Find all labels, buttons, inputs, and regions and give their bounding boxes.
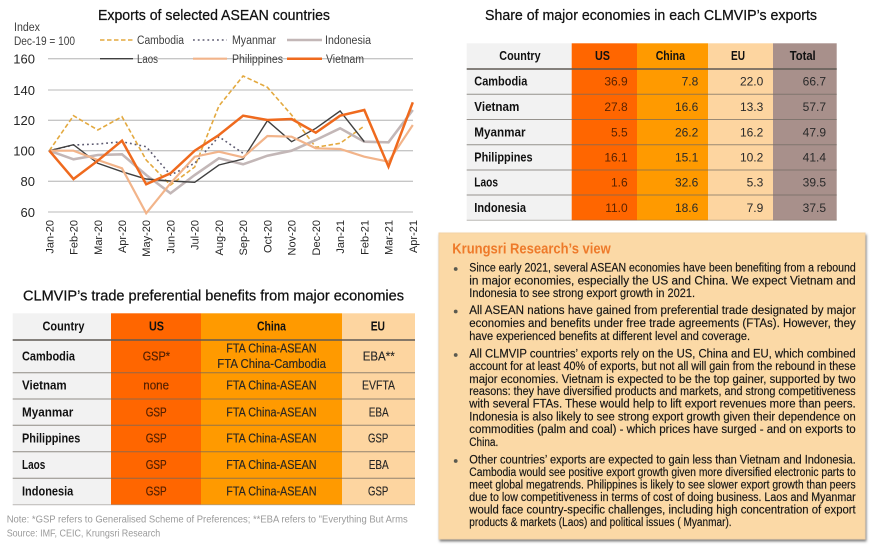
- x axis labels: Apr-20: [117, 220, 129, 253]
- bullet 2: economies and benefits under free trade agreements (FTAs). However, they: [469, 318, 856, 330]
- row: Myanmar: [22, 405, 389, 419]
- x axis labels: Jan-20: [44, 220, 56, 254]
- table header: Country: [42, 320, 85, 334]
- row: Vietnam: [474, 100, 826, 114]
- row: Vietnam: EVFTA: [362, 379, 396, 393]
- row: Philippines: GSP: [368, 431, 388, 445]
- row: Laos: EBA: [369, 458, 389, 472]
- y axis labels: 120: [13, 113, 35, 128]
- row: Myanmar: EBA: [369, 405, 389, 419]
- bullet 4: Other countries’ exports are expected to gain less than Vietnam and Indonesia.: [469, 454, 856, 466]
- table header: US: [595, 49, 610, 63]
- table header: EU: [731, 49, 745, 63]
- bullet 3: account for at least 40% of exports, but not all will gain from the rebound in these: [469, 361, 856, 373]
- row: Myanmar: 16.2: [740, 125, 764, 139]
- y axis labels: [13, 52, 35, 220]
- x axis labels: Jun-20: [166, 220, 178, 254]
- line: Vietnam: [49, 102, 413, 184]
- row: Laos: 5.3: [747, 176, 764, 190]
- line: Myanmar: [49, 137, 243, 175]
- x axis labels: Aug-20: [214, 220, 226, 255]
- row: Cambodia: [474, 75, 826, 89]
- x axis labels: Mar-21: [384, 220, 396, 255]
- row: Indonesia: GSP: [146, 485, 167, 499]
- y axis labels: 60: [21, 205, 35, 220]
- bullet 2: [454, 305, 856, 343]
- row: Vietnam: FTA China-ASEAN: [226, 379, 317, 393]
- bullet 1: [454, 262, 856, 300]
- row: Laos: [474, 176, 826, 190]
- bullet 3: [454, 348, 856, 449]
- row: Philippines: [22, 431, 388, 445]
- x axis labels: Apr-21: [408, 220, 420, 253]
- line: Cambodia: [49, 76, 364, 185]
- x axis labels: Nov-20: [287, 220, 299, 255]
- row: Cambodia: 22.0: [740, 75, 764, 89]
- table header: Country: [499, 49, 541, 63]
- table header: [42, 320, 385, 334]
- table header: [499, 49, 816, 63]
- row: Laos: GSP: [146, 458, 167, 472]
- row: Indonesia: Indonesia: [474, 201, 527, 215]
- row: Indonesia: [22, 485, 388, 499]
- line: Laos: [49, 111, 364, 182]
- row: Vietnam: Vietnam: [22, 379, 67, 393]
- bullet 3: reasons: they have diversified products and markets, and strong competitiveness: [469, 386, 856, 398]
- x axis labels: Sep-20: [238, 220, 250, 255]
- row: Indonesia: 11.0: [605, 201, 628, 215]
- panel: trade preferential benefits: [13, 288, 415, 505]
- x axis labels: Dec-20: [311, 220, 323, 255]
- row: Philippines: 16.1: [604, 150, 628, 164]
- row: Philippines: Philippines: [22, 431, 80, 445]
- row: Philippines: FTA China-ASEAN: [226, 431, 317, 445]
- row: Myanmar: GSP: [146, 405, 167, 419]
- x axis labels: Mar-20: [93, 220, 105, 255]
- row: Philippines: 10.2: [740, 150, 764, 164]
- bullet 1: in major economies, especially the US and China. We expect Vietnam and: [469, 275, 856, 287]
- x axis labels: May-20: [141, 220, 153, 257]
- bullet 4: [454, 454, 856, 529]
- x axis labels: Oct-20: [262, 220, 274, 253]
- heading: Krungsri Research's view: Krungsri Research’s view: [452, 240, 611, 258]
- row: Cambodia: 7.8: [682, 75, 699, 89]
- row: Cambodia: GSP*: [143, 350, 170, 364]
- row: Indonesia: FTA China-ASEAN: [226, 485, 317, 499]
- x axis labels: Jan-21: [335, 220, 347, 254]
- y axis labels: 100: [13, 144, 35, 158]
- row: Indonesia: 7.9: [747, 201, 764, 215]
- row: Cambodia: 66.7: [803, 75, 826, 89]
- legend: [100, 35, 372, 66]
- table backgrounds: [13, 313, 415, 505]
- title: benefits table: CLMVIP’s trade preferential benefits from major economies: [23, 288, 404, 304]
- row: Myanmar: 26.2: [675, 125, 699, 139]
- line: Indonesia: [49, 110, 413, 193]
- y axis labels: 160: [13, 52, 35, 66]
- x axis labels: Feb-21: [359, 220, 371, 255]
- row: Vietnam: 13.3: [740, 100, 764, 114]
- row: Indonesia: [474, 201, 826, 215]
- table header: US: [149, 320, 164, 334]
- y axis unit label: [14, 22, 75, 48]
- x axis labels: Jul-20: [190, 220, 202, 250]
- legend: Myanmar: [232, 35, 276, 47]
- row: Indonesia: 18.6: [675, 201, 699, 215]
- legend: Cambodia: [137, 35, 185, 47]
- row: Philippines: GSP: [146, 431, 167, 445]
- table header: EU: [371, 320, 385, 334]
- row: Laos: Laos: [22, 458, 45, 472]
- bullet 3: with several FTAs. These would help to lift export revenues more than peers.: [468, 398, 856, 410]
- row: Philippines: 15.1: [675, 150, 699, 164]
- panel: Krungsri Research's view: [439, 233, 865, 539]
- row: Cambodia: FTA China-Cambodia: [217, 357, 326, 371]
- footnote and source: Note: *GSP refers to Generalised Scheme of Preferences; **EBA refers to "Everything But Arms: [7, 514, 408, 526]
- x axis labels: Feb-20: [68, 220, 80, 255]
- row: Philippines: Philippines: [474, 150, 533, 164]
- table backgrounds: [467, 43, 837, 220]
- bullet 1: Indonesia to see strong export growth in 2021.: [469, 288, 695, 300]
- row: Myanmar: 47.9: [803, 125, 826, 139]
- row: Laos: [22, 458, 389, 472]
- row: Cambodia: Cambodia: [474, 75, 528, 89]
- row: Cambodia: EBA**: [363, 350, 395, 364]
- row: Vietnam: Vietnam: [474, 100, 519, 114]
- row: Laos: Laos: [474, 176, 498, 190]
- row: Cambodia: Cambodia: [22, 350, 76, 364]
- row: Laos: 39.5: [803, 176, 826, 190]
- row: Vietnam: 27.8: [604, 100, 628, 114]
- row: Cambodia: 36.9: [604, 75, 628, 89]
- bullet 3: major economies. Vietnam is expected to be the top gainer, supported by two: [469, 374, 856, 386]
- row: Cambodia: [22, 342, 395, 371]
- row: Cambodia: FTA China-ASEAN: [226, 342, 317, 356]
- table header: China: [257, 320, 287, 334]
- bullet 3: Indonesia is also likely to see strong export growth given their dependence on: [469, 412, 856, 424]
- row: Vietnam: none: [143, 379, 169, 393]
- row: Myanmar: Myanmar: [474, 125, 526, 139]
- panel: exports line chart: [13, 8, 420, 257]
- title: exports chart: Exports of selected ASEAN countries: [98, 8, 330, 24]
- row: Vietnam: 57.7: [803, 100, 826, 114]
- bullet 4: would face country-specific challenges, including high concentration of export: [468, 504, 856, 516]
- row: Myanmar: FTA China-ASEAN: [226, 405, 317, 419]
- bullet 2: All ASEAN nations have gained from preferential trade designated by major: [469, 305, 856, 317]
- y axis unit label: Dec-19 = 100: [14, 36, 75, 48]
- row: Laos: FTA China-ASEAN: [226, 458, 317, 472]
- row: Indonesia: 37.5: [803, 201, 826, 215]
- row: Vietnam: [22, 379, 396, 393]
- row: Myanmar: Myanmar: [22, 405, 73, 419]
- row: Vietnam: 16.6: [675, 100, 699, 114]
- x axis labels: [44, 220, 420, 257]
- y axis labels: 140: [13, 83, 35, 98]
- table header: China: [656, 49, 686, 63]
- row: Indonesia: GSP: [368, 485, 388, 499]
- line: Philippines: [49, 125, 413, 213]
- row: Indonesia: Indonesia: [22, 485, 74, 499]
- legend: Philippines: [232, 54, 283, 66]
- footnote and source: Source: IMF, CEIC, Krungsri Research: [7, 527, 160, 539]
- row: Myanmar: 5.5: [611, 125, 628, 139]
- bullet 4: products & markets (Laos) and political issues ( Myanmar).: [469, 517, 732, 529]
- bullet 2: have experienced benefits at different level and coverage.: [469, 331, 750, 343]
- bullet 3: China.: [469, 437, 498, 449]
- row: Laos: 1.6: [611, 176, 628, 190]
- row: Laos: 32.6: [675, 176, 699, 190]
- row: Myanmar: [474, 125, 826, 139]
- footnote and source: [7, 514, 408, 539]
- y axis unit label: Index: [14, 22, 40, 34]
- legend: Vietnam: [326, 54, 364, 66]
- row: Philippines: 41.4: [803, 150, 826, 164]
- panel: share of major economies: [467, 8, 837, 220]
- bullet 3: commodities (palm and coal) - which prices have surged - and on exports to: [469, 424, 856, 436]
- table header: Total: [790, 49, 816, 63]
- legend: Indonesia: [325, 35, 372, 47]
- title: share table: Share of major economies in each CLMVIP’s exports: [485, 8, 817, 24]
- row: Philippines: [474, 150, 826, 164]
- legend: Laos: [137, 54, 158, 66]
- y axis labels: 80: [21, 174, 35, 189]
- bullet 3: All CLMVIP countries’ exports rely on the US, China and EU, which combined: [469, 348, 856, 360]
